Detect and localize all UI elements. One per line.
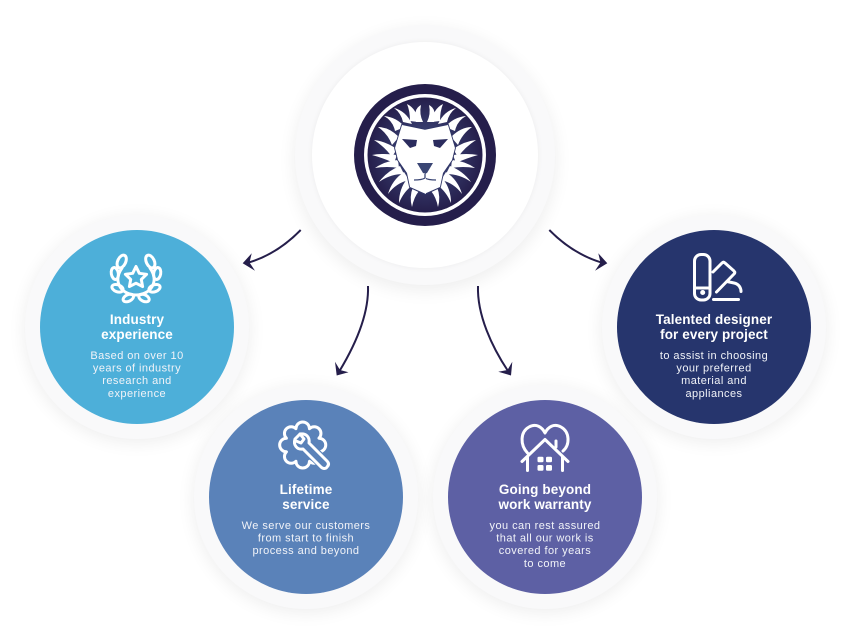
icon: gear and wrench [280,422,328,468]
text: industry experience description: years of industry [93,362,181,374]
panel: work warranty [433,385,657,612]
text: work warranty description: you can rest assured [490,520,600,532]
arrow: to industry experience [243,230,301,271]
text: lifetime service description: We serve our customers [242,520,370,532]
heading: talented designer: for every project [660,327,768,342]
arrow: to lifetime service [335,286,368,376]
panel: industry experience [25,215,249,442]
panel: talented designer [602,215,826,442]
panel: lifetime service [194,385,418,612]
heading: lifetime service: Lifetime [280,482,333,497]
text: talented designer description: appliances [686,388,743,400]
heading: talented designer: Talented designer [656,312,773,327]
heading: work warranty: Going beyond [499,482,591,497]
arrow: to talented designer [549,230,607,271]
center circle with logo [295,25,555,290]
text: industry experience description: Based on over 10 [90,350,184,362]
icon: laurel with star [110,254,162,303]
arrow: to work warranty [478,286,512,376]
text: work warranty description: to come [524,558,566,570]
text: industry experience description: experience [108,388,166,400]
text: talented designer description: material and [681,375,747,387]
heading: industry experience: experience [101,327,173,342]
heading: industry experience: Industry [110,312,164,327]
text: industry experience description: research and [102,375,172,387]
text: lifetime service description: from start to finish [258,532,354,544]
icon: house with heart [522,425,568,471]
heading: lifetime service: service [282,497,330,512]
text: lifetime service description: process and beyond [252,545,360,557]
text: talented designer description: your preferred [676,362,752,374]
icon: colour swatches [694,254,741,300]
text: work warranty description: covered for years [499,545,591,557]
icon: lion logo [354,84,496,226]
text: work warranty description: that all our work is [496,532,594,544]
heading: work warranty: work warranty [497,497,592,512]
text: talented designer description: to assist in choosing [660,350,768,362]
